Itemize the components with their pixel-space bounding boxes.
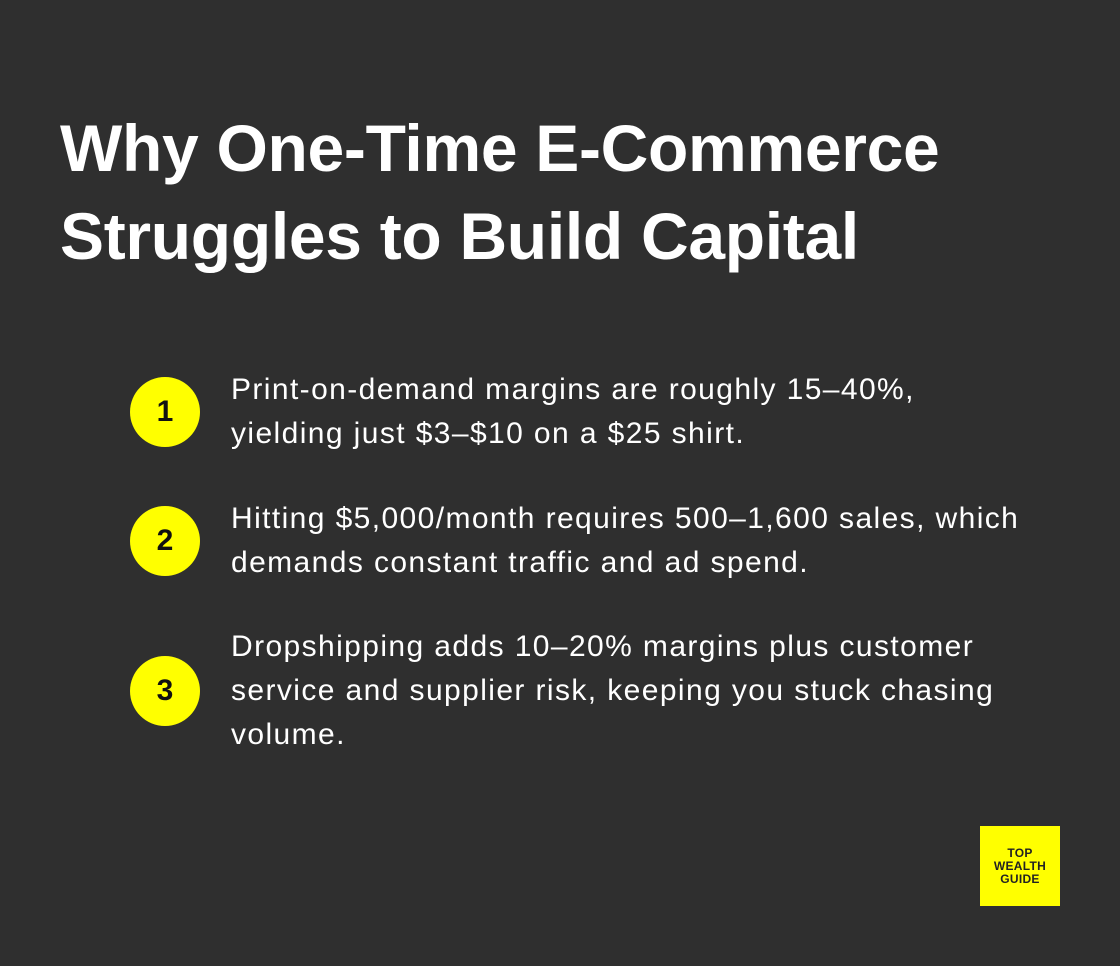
item 2 [130, 502, 1019, 579]
text 3 [231, 630, 994, 751]
badge 2 [130, 506, 200, 576]
logo: TOP [1007, 846, 1033, 860]
logo: WEALTH [994, 858, 1046, 872]
item 1 [130, 373, 915, 450]
text 3: service and supplier risk, keeping you stuck chasing [231, 674, 994, 707]
logo: GUIDE [1000, 872, 1040, 886]
title: Struggles to Build Capital [60, 199, 859, 273]
text 2: demands constant traffic and ad spend. [231, 546, 809, 579]
text 1: yielding just $3–$10 on a $25 shirt. [231, 417, 745, 450]
text 2: Hitting $5,000/month requires 500–1,600 sales, which [231, 502, 1019, 535]
badge 3 [130, 656, 200, 726]
badge 1 [130, 377, 200, 447]
item 3 [130, 630, 994, 751]
badge 3: 3 [157, 674, 173, 707]
badge 1: 1 [157, 395, 173, 428]
text 1 [231, 373, 915, 450]
text 2 [231, 502, 1019, 579]
title: Why One-Time E-Commerce [60, 111, 939, 185]
badge 2: 2 [157, 524, 173, 557]
logo [980, 826, 1060, 906]
text 1: Print-on-demand margins are roughly 15–40%, [231, 373, 915, 406]
text 3: Dropshipping adds 10–20% margins plus customer [231, 630, 974, 663]
text 3: volume. [231, 718, 346, 751]
title [60, 111, 939, 273]
